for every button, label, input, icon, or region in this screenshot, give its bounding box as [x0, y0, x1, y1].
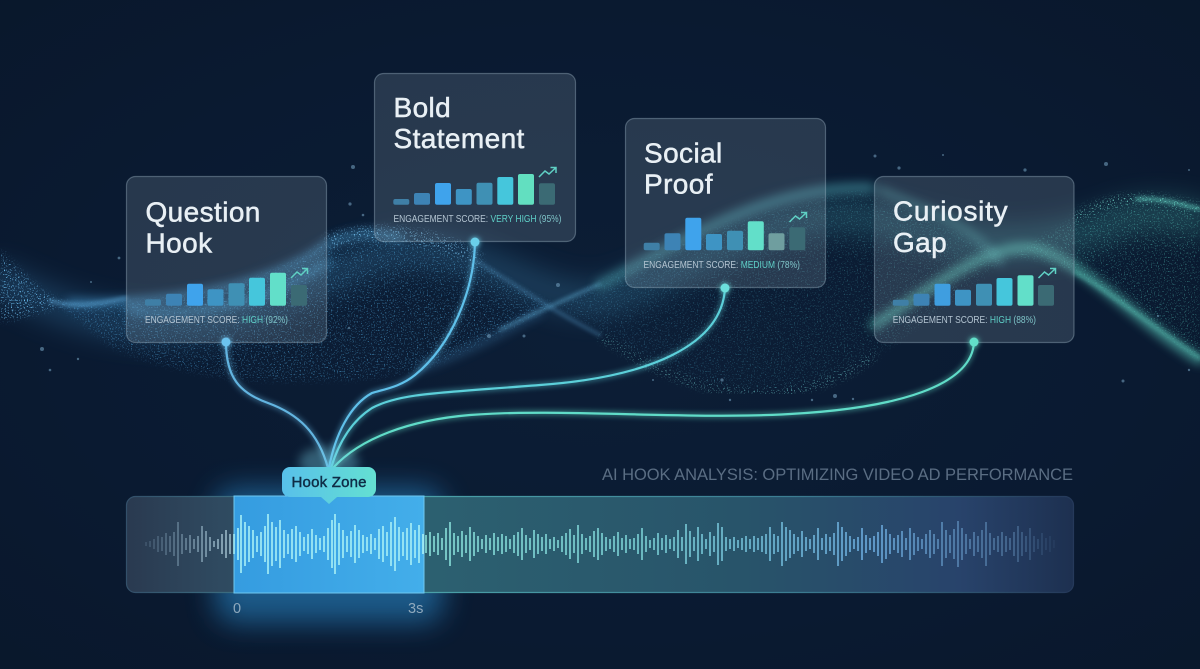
icon: trend arrow [790, 212, 806, 222]
connector dots [222, 238, 978, 346]
bar chart [393, 174, 555, 205]
curve: question hook [226, 342, 328, 468]
tag label: Hook Zone [292, 474, 366, 491]
engagement label: ENGAGEMENT SCORE: HIGH (92%) [145, 314, 288, 326]
card: Curiosity Gap [874, 176, 1074, 342]
heading: Bold [394, 92, 451, 123]
icon: trend arrow [291, 268, 308, 278]
heading: Statement [394, 123, 525, 154]
chart title: AI HOOK ANALYSIS: OPTIMIZING VIDEO AD PERFORMANCE [602, 466, 1073, 484]
heading: Proof [644, 168, 713, 200]
icon: trend arrow [1038, 268, 1056, 278]
card: Bold Statement [374, 74, 576, 242]
bar chart [145, 273, 307, 306]
card: Question Hook [126, 176, 326, 342]
connector curves [226, 242, 974, 468]
bar chart [644, 218, 805, 250]
heading: Social [644, 138, 723, 168]
engagement label: ENGAGEMENT SCORE: VERY HIGH (95%) [394, 213, 562, 225]
curve: bold statement [329, 242, 475, 468]
curve: curiosity gap [333, 342, 974, 468]
timeline bar [126, 488, 1074, 623]
scattered particles [40, 154, 1190, 401]
heading: Question [146, 196, 261, 228]
bar chart [893, 275, 1054, 306]
tick label: end: 3s [408, 601, 423, 617]
engagement label: ENGAGEMENT SCORE: HIGH (88%) [893, 314, 1036, 326]
heading: Curiosity [893, 196, 1008, 226]
engagement label: ENGAGEMENT SCORE: MEDIUM (78%) [644, 259, 800, 271]
waveform [146, 514, 1054, 574]
heading: Hook [146, 228, 213, 258]
fan glow above hook zone [299, 446, 359, 478]
curve: social proof [331, 288, 725, 468]
card: Social Proof [626, 118, 826, 288]
hook glow [215, 488, 443, 623]
tick label: start: 0 [233, 601, 241, 617]
hook zone tag [282, 467, 376, 504]
hook zone highlight [234, 496, 424, 593]
waveform track [126, 496, 1074, 592]
particle ribbon wave [0, 188, 1200, 394]
heading line 2: Gap [893, 227, 947, 258]
icon: trend arrow [539, 168, 556, 177]
